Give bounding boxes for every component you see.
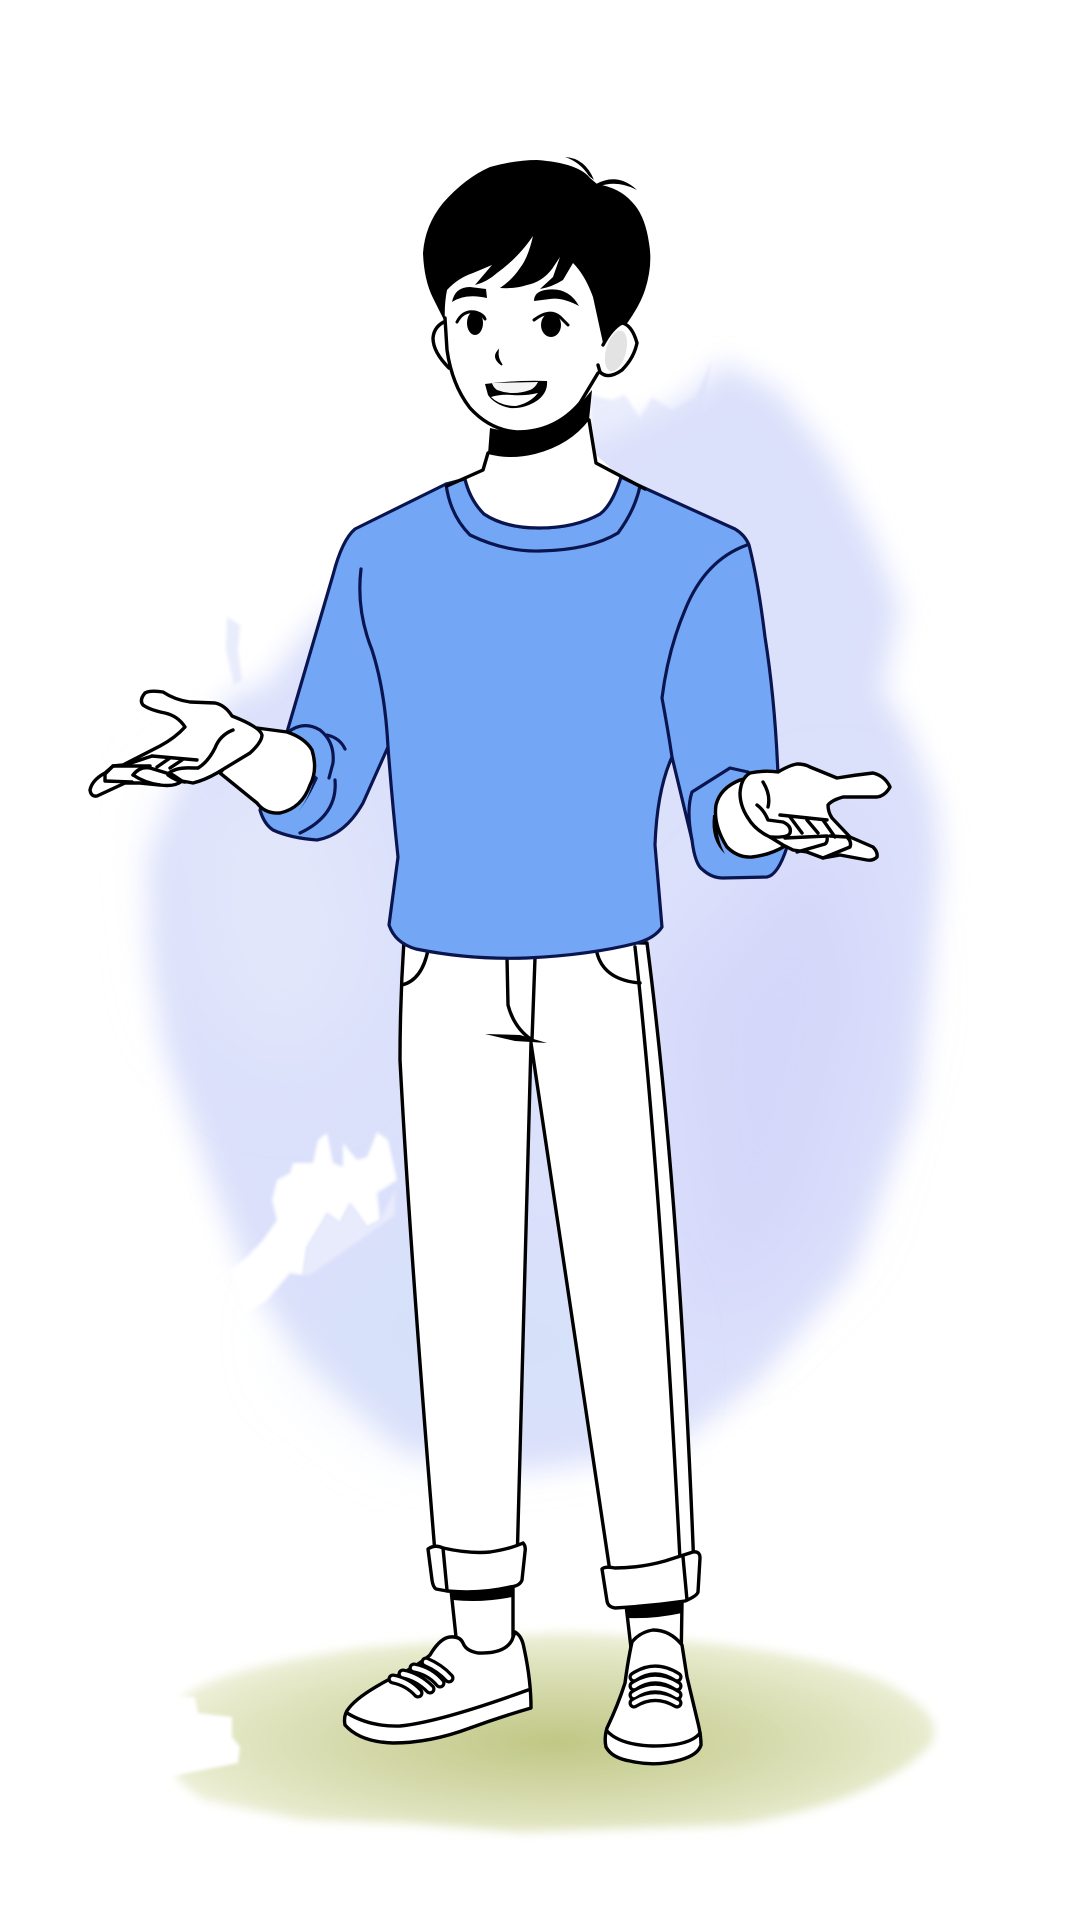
trouser left pocket [402,950,428,985]
left fingers [105,756,198,785]
tongue [491,393,538,406]
left sweater cuff [287,726,345,833]
right hand [740,764,890,860]
pale wash upper right [590,360,712,460]
pale band beside white brush [303,1190,395,1275]
right shoe [605,1630,701,1764]
left palm crease [198,730,233,768]
right forearm [715,775,790,857]
neck shadow [488,390,592,457]
trouser fly [507,958,535,1040]
right arm shadow [712,815,725,854]
hair [423,160,650,343]
left sock [451,1586,513,1665]
trouser crease [485,1034,547,1043]
left ear [433,321,449,368]
right eye [534,313,568,337]
collar inner line [465,477,621,528]
left cuff fold line [443,1548,447,1590]
pale streak upper left [226,617,242,685]
sweater [260,455,787,958]
left hand [90,691,262,796]
left sock band [451,1586,513,1601]
left shoe laces [393,1662,449,1693]
right sock band [626,1601,682,1618]
trouser side stripe [635,947,680,1560]
right fingers [780,815,851,858]
right sock [626,1601,682,1665]
right ear [598,323,637,376]
sweater collar [446,477,640,551]
sweater right sleeve seam [662,545,747,757]
right eyebrow [534,289,579,306]
white brush stroke lower left [230,1132,397,1315]
right shoe laces [634,1670,677,1703]
collar neck opening [465,455,621,528]
ear shading [601,328,631,374]
teeth [492,382,538,393]
nose [496,351,502,365]
trouser right pocket [597,953,640,983]
right cuff fold line [683,1557,687,1600]
left eye [457,311,485,335]
right palm crease [757,782,790,837]
right trouser cuff [602,1552,700,1608]
left forearm [220,728,315,813]
left arm shadow [298,775,318,812]
right shoe sole line [607,1731,700,1746]
left trouser cuff [428,1543,525,1592]
hair wisps [565,157,637,190]
sweater left sleeve seam [360,569,388,747]
left eyebrow [452,287,487,302]
face [423,157,650,432]
right sweater cuff [689,768,748,840]
left shoe [344,1632,531,1743]
left shoe sole line [347,1690,528,1726]
background: blue watercolor wash [150,360,940,1470]
mouth [485,381,547,408]
background: olive ground shadow [150,1632,934,1832]
neck [447,390,645,489]
trousers [400,940,694,1585]
